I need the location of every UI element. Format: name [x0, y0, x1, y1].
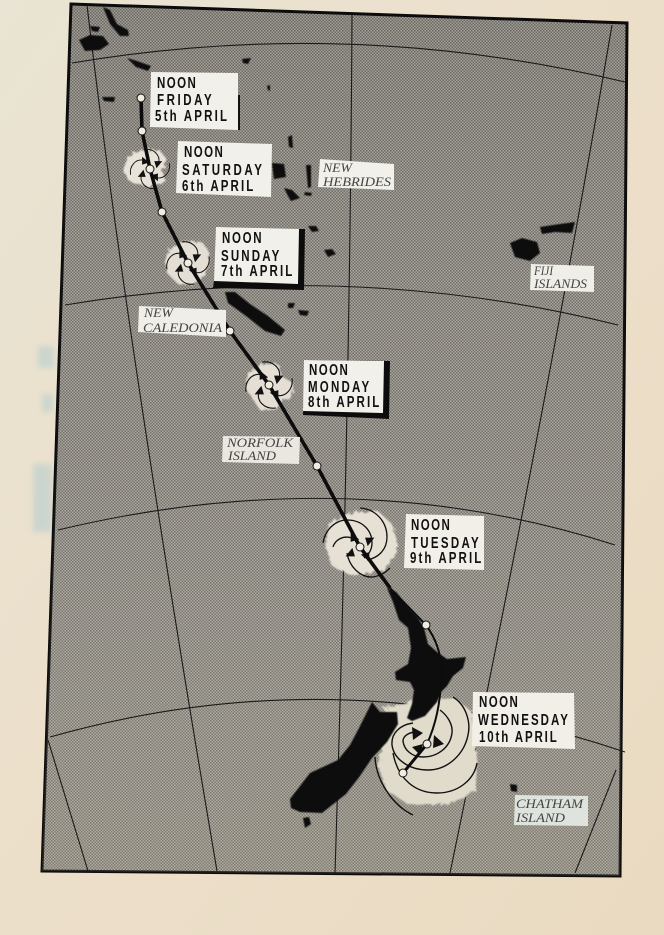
label: New Caledonia: CALEDONIA [143, 321, 222, 335]
label: noon Wednesday: NOON [479, 692, 518, 710]
label: noon Saturday: NOON [184, 142, 223, 160]
label: Norfolk Island: ISLAND [227, 449, 276, 463]
label: Chatham Island: CHATHAM [516, 797, 584, 811]
label: Chatham Island: ISLAND [515, 811, 565, 825]
label: noon Monday: MONDAY [308, 377, 370, 395]
label: noon Friday: NOON [157, 73, 196, 91]
storm: Monday [246, 362, 294, 410]
label: Chatham Island [514, 795, 588, 826]
label: noon Sunday: 7th APRIL [221, 261, 293, 279]
label: noon Friday: FRIDAY [157, 90, 212, 108]
label: noon Sunday: NOON [222, 228, 262, 246]
label: noon Saturday [176, 141, 272, 197]
label: noon Sunday [213, 227, 305, 290]
label: noon Friday: 5th APRIL [155, 106, 227, 124]
island: Chatham [510, 784, 517, 792]
label: noon Monday: 8th APRIL [308, 392, 380, 410]
storm: Tuesday [323, 508, 398, 577]
label: noon Wednesday: 10th APRIL [479, 727, 557, 745]
islands: Fiji [510, 222, 575, 261]
label: noon Saturday: 6th APRIL [182, 176, 254, 194]
label: noon Monday [303, 360, 390, 419]
label: Norfolk Island [222, 436, 300, 464]
label: noon Saturday: SATURDAY [182, 160, 263, 178]
islands: New Hebrides [272, 135, 336, 257]
label: Norfolk Island: NORFOLK [226, 436, 294, 450]
label: noon Tuesday: 9th APRIL [410, 548, 482, 566]
label: New Hebrides [318, 159, 394, 190]
paper smudges [33, 346, 54, 532]
label: noon Wednesday: WEDNESDAY [478, 710, 569, 728]
storm: Saturday [124, 149, 170, 189]
storm spirals: Wednesday [375, 697, 477, 815]
island: New Caledonia [225, 292, 309, 336]
cyclone track [137, 94, 441, 777]
label: Fiji Islands: FIJI [533, 264, 554, 278]
label: noon Tuesday: TUESDAY [411, 533, 479, 551]
islands: north-west group [79, 7, 270, 102]
storm: Sunday [165, 241, 210, 284]
label: New Hebrides: HEBRIDES [322, 175, 392, 189]
label: noon Sunday: SUNDAY [221, 246, 280, 264]
label: noon Wednesday [472, 692, 575, 749]
island: New Zealand North Island [387, 588, 466, 721]
island: New Zealand South Island [290, 702, 398, 813]
label: Fiji Islands: ISLANDS [533, 277, 588, 291]
label: New Caledonia [138, 306, 226, 337]
label: New Caledonia: NEW [143, 306, 175, 320]
label: Fiji Islands [530, 264, 594, 292]
island: Stewart [303, 817, 311, 828]
label: noon Tuesday [404, 514, 484, 570]
label: noon Monday: NOON [309, 360, 348, 378]
label: New Hebrides: NEW [322, 161, 354, 175]
label: noon Friday [150, 72, 240, 130]
storm: Wednesday [378, 698, 477, 805]
label: noon Tuesday: NOON [411, 515, 450, 533]
